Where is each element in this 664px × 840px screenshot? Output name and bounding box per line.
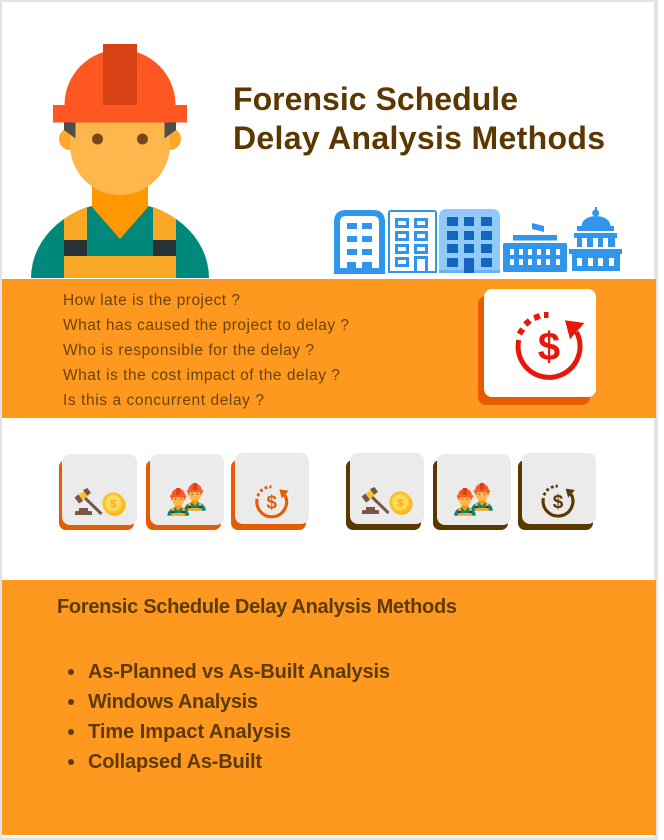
card: cost ring (orange) xyxy=(231,453,309,530)
icon: light blue tower xyxy=(439,209,500,273)
panel: methods band xyxy=(2,580,656,835)
methods list xyxy=(68,661,390,773)
card: gavel and coin (orange) xyxy=(59,454,137,530)
methods list: As-Planned vs As-Built Analysis xyxy=(88,661,390,683)
title: Forensic Schedule xyxy=(233,81,518,117)
card: gavel and coin (brown): $ xyxy=(397,498,403,510)
icon: apartment building xyxy=(388,210,437,273)
methods list: Time Impact Analysis xyxy=(88,721,291,743)
card: gavel and coin (brown) xyxy=(346,453,424,530)
question list: Who is responsible for the delay ? xyxy=(63,342,314,359)
card: cost ring (brown): $ xyxy=(553,492,564,513)
question list: What has caused the project to delay ? xyxy=(63,317,349,334)
card: workers (orange) xyxy=(146,454,224,530)
panel: questions band xyxy=(2,279,656,418)
question list: How late is the project ? xyxy=(63,292,240,309)
icon: office building outline xyxy=(334,210,385,274)
methods list: Windows Analysis xyxy=(88,691,258,713)
card: workers (brown) xyxy=(433,454,511,530)
question list: Is this a concurrent delay ? xyxy=(63,392,264,409)
icon: capitol dome xyxy=(569,207,622,271)
card: cost ring (brown) xyxy=(518,453,596,530)
question list xyxy=(63,292,349,409)
title: Delay Analysis Methods xyxy=(233,120,605,156)
card: cost impact icon: $ xyxy=(538,325,560,369)
icon: government hall xyxy=(503,223,567,272)
methods list: Collapsed As-Built xyxy=(88,751,262,773)
card: cost ring (orange): $ xyxy=(266,492,277,514)
question list: What is the cost impact of the delay ? xyxy=(63,367,340,384)
methods heading: Forensic Schedule Delay Analysis Methods xyxy=(57,596,457,618)
worker illustration xyxy=(31,44,209,278)
card: gavel and coin (orange): $ xyxy=(110,498,116,510)
card: cost impact icon xyxy=(478,289,596,405)
title xyxy=(233,81,605,156)
